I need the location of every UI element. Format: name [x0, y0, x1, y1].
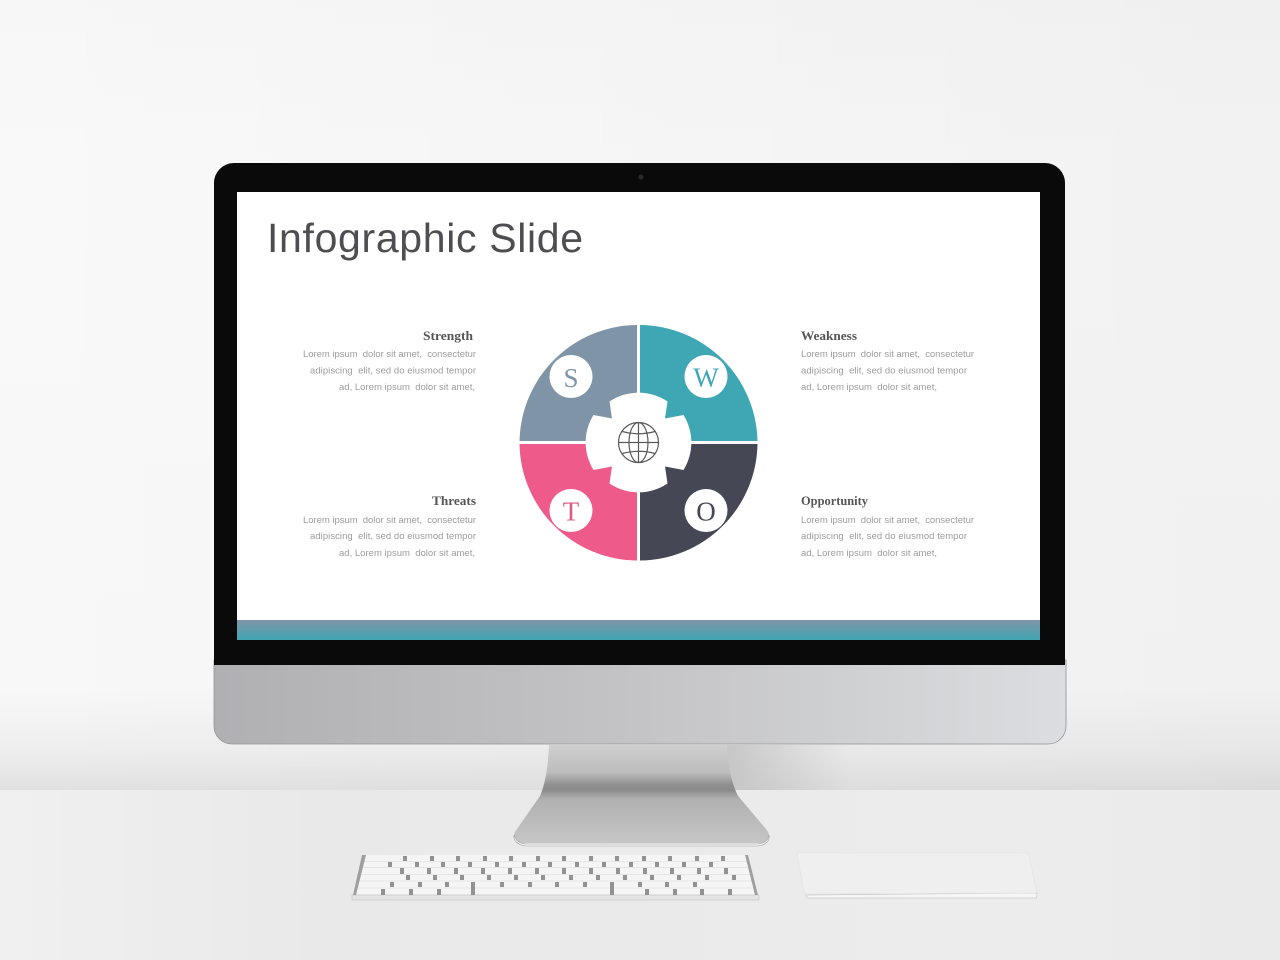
keyboard base — [352, 895, 759, 900]
stand base edge — [514, 835, 769, 846]
icon: globe — [618, 422, 658, 462]
text block: Opportunity — [801, 493, 974, 559]
key gaps — [381, 856, 736, 895]
text block: Threats — [303, 493, 476, 559]
text block: Strength: Lorem ipsum dolor sit amet, consectetur — [303, 349, 476, 360]
title: Infographic Slide — [267, 215, 583, 261]
monitor — [214, 163, 1066, 846]
text block: Opportunity: Opportunity — [801, 493, 868, 508]
segment: O — [640, 444, 758, 560]
trackpad — [797, 853, 1037, 898]
text block: Threats: ad, Lorem ipsum dolor sit amet, — [339, 548, 475, 559]
segment: T — [520, 444, 637, 560]
footer bar — [237, 620, 1040, 640]
slide background — [237, 192, 1040, 640]
text block: Threats: Threats — [432, 493, 476, 508]
badge: T: T — [563, 496, 580, 526]
text block: Strength: Strength — [423, 328, 474, 343]
text block: Weakness: Weakness — [801, 328, 857, 343]
text block: Strength — [303, 328, 476, 393]
segment: W — [640, 325, 758, 441]
center white cross shape — [586, 393, 691, 492]
text block: Opportunity: ad, Lorem ipsum dolor sit amet, — [801, 548, 937, 559]
SWOT circle diagram — [520, 325, 758, 560]
webcam — [638, 174, 644, 180]
text block: Threats: Lorem ipsum dolor sit amet, consectetur — [303, 515, 476, 526]
keyboard body — [353, 855, 758, 899]
text block: Weakness: ad, Lorem ipsum dolor sit amet, — [801, 382, 937, 393]
monitor stand — [514, 745, 769, 843]
key row lines — [353, 862, 757, 895]
text block: Opportunity: Lorem ipsum dolor sit amet, consectetur — [801, 515, 974, 526]
text block: Weakness: Lorem ipsum dolor sit amet, consectetur — [801, 349, 974, 360]
badge: T — [550, 489, 592, 532]
monitor chin — [214, 660, 1066, 744]
badge: S: S — [563, 363, 579, 393]
badge: W: W — [693, 362, 719, 392]
badge: W — [684, 355, 728, 398]
badge: O — [684, 489, 728, 532]
text block: Threats: adipiscing elit, sed do eiusmod tempor — [310, 531, 476, 542]
keyboard side edges — [353, 855, 758, 895]
screen slide — [237, 192, 1040, 640]
text block: Opportunity: adipiscing elit, sed do eiusmod tempor — [801, 531, 967, 542]
segment: S — [520, 325, 637, 441]
keyboard — [352, 855, 759, 900]
text block: Strength: ad, Lorem ipsum dolor sit amet, — [339, 382, 475, 393]
text block: Weakness — [801, 328, 974, 393]
text block: Weakness: adipiscing elit, sed do eiusmod tempor — [801, 366, 967, 376]
badge: S — [550, 355, 592, 398]
badge: O: O — [696, 496, 716, 526]
monitor bezel — [214, 163, 1065, 665]
text block: Strength: adipiscing elit, sed do eiusmod tempor — [310, 366, 476, 376]
